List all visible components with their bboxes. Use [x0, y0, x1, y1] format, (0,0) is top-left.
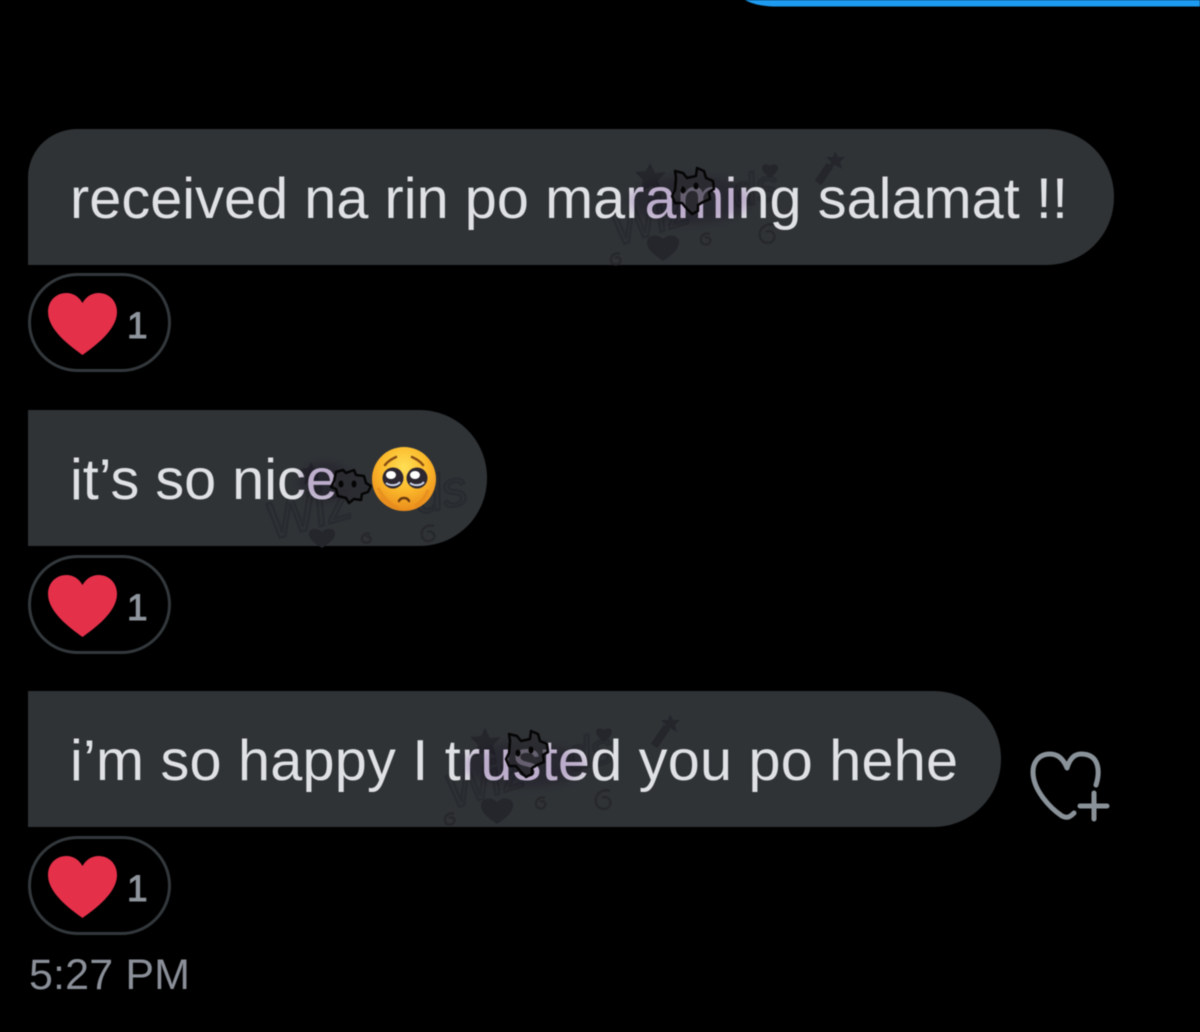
watermark 3 — [439, 714, 680, 825]
message bubble 1 — [28, 129, 1114, 265]
watermark 1: Wiz — [604, 181, 696, 256]
message text 3: i’m so happy I trusted you po hehe — [70, 729, 958, 793]
lilac watermark tint 3 — [463, 743, 587, 787]
watermark 3: ds — [562, 723, 618, 781]
count 1: 1 — [127, 305, 148, 346]
watermark 1: ds — [727, 160, 783, 218]
heart 2 — [48, 575, 117, 637]
icon: pleading face emoji — [372, 447, 436, 511]
mascot sticker 3 — [506, 731, 548, 777]
heart 3 — [48, 856, 117, 918]
count 3: 1 — [127, 868, 148, 909]
mascot sticker 1 — [672, 168, 714, 214]
reaction pill 1 — [30, 274, 170, 370]
heart 1 — [48, 293, 117, 355]
count 2: 1 — [127, 587, 148, 628]
watermark 2: Wiz — [259, 472, 358, 552]
blue bar at top edge — [745, 0, 1200, 6]
watermark 2: ds — [409, 459, 472, 525]
watermark 3: Wiz — [439, 744, 531, 819]
reaction pill 3 — [30, 838, 170, 934]
lilac watermark tint 2 — [299, 462, 351, 502]
icon: add reaction heart — [1033, 754, 1107, 819]
message text 2: it’s so nice — [70, 448, 338, 512]
reaction pill 2 — [30, 556, 170, 652]
lilac watermark tint 1 — [628, 176, 752, 224]
message text 1: received na rin po maraming salamat !! — [70, 167, 1068, 231]
mascot sticker 2 — [331, 470, 371, 503]
watermark 1 — [604, 151, 845, 265]
message bubble 3 — [28, 691, 1001, 827]
watermark 2 — [259, 459, 472, 552]
message bubble 2 — [28, 410, 487, 552]
timestamp: 5:27 PM — [29, 951, 190, 999]
